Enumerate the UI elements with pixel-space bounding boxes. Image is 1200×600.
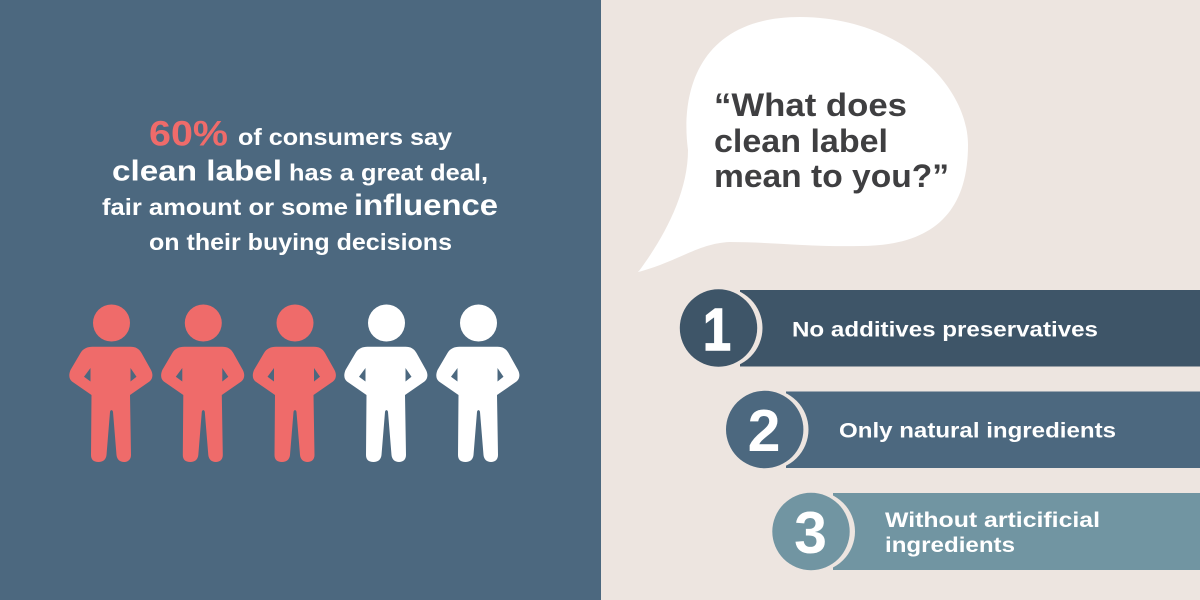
- icon: person 4: [344, 304, 427, 462]
- pictogram: 3 of 5 people highlighted: [69, 304, 519, 462]
- bar 1: [740, 290, 1200, 366]
- circle 1: [680, 289, 757, 367]
- number 2: 2: [748, 398, 780, 464]
- circle 3 separator: [774, 491, 855, 572]
- text: influence: influence: [354, 189, 498, 222]
- icon: person 5: [436, 304, 519, 462]
- panel: left background: [0, 0, 601, 600]
- text: heading line 2: clean label: [714, 123, 888, 159]
- list item 2: [726, 389, 1200, 470]
- heading: question: [714, 87, 949, 194]
- list item 3: [772, 491, 1200, 572]
- text: 60%: 60%: [149, 114, 228, 154]
- circle 3: [772, 493, 850, 570]
- label 2: Only natural ingredients: [839, 420, 1116, 442]
- icon: person 1: [69, 304, 152, 462]
- label 3 line 2: ingredients: [885, 534, 1015, 557]
- number 3: 3: [794, 500, 827, 566]
- text: has a great deal,: has a great deal,: [289, 160, 488, 186]
- speech bubble: [638, 17, 968, 272]
- list item 1: [680, 288, 1200, 368]
- bar 2: [786, 392, 1200, 468]
- text: heading line 3: mean to you?”: [714, 158, 949, 194]
- circle 2: [726, 391, 803, 468]
- bar 3: [833, 493, 1200, 570]
- statistic text: [102, 114, 498, 255]
- label 3 line 1: Without articificial: [885, 509, 1100, 532]
- circle 2 separator: [728, 389, 808, 470]
- panel: right background: [601, 0, 1200, 600]
- text: fair amount or some: fair amount or some: [102, 194, 348, 220]
- circle 1 separator: [682, 288, 762, 368]
- icon: person 2: [161, 304, 244, 462]
- icon: person 3: [253, 304, 336, 462]
- text: heading line 1: “What does: [714, 87, 907, 123]
- label 1: No additives preservatives: [792, 318, 1098, 342]
- label 3: [885, 509, 1100, 557]
- text: clean label: clean label: [112, 156, 282, 188]
- text: of consumers say: of consumers say: [238, 124, 452, 150]
- number 1: 1: [703, 297, 731, 363]
- text: on their buying decisions: on their buying decisions: [149, 229, 452, 255]
